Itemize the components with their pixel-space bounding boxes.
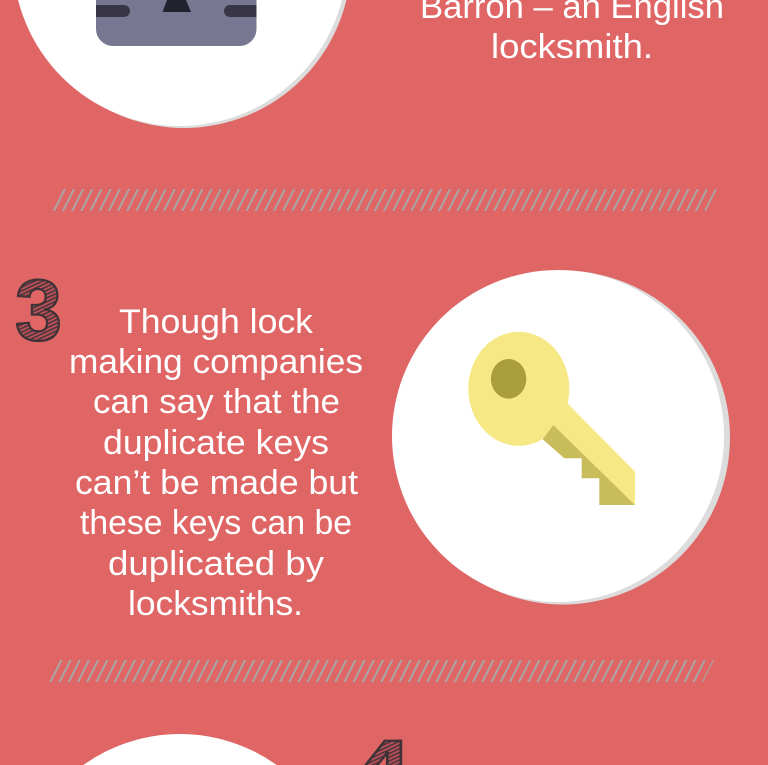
text block: fact three: Though lock <box>119 303 314 341</box>
number 3: 3 <box>15 263 62 359</box>
panel: bottom circle <box>83 734 277 765</box>
text block: fact two ending: locksmith. <box>491 28 653 66</box>
icon: key <box>468 332 635 505</box>
text block: fact three: duplicated by <box>108 545 324 583</box>
white circle <box>392 270 724 602</box>
text block: fact three: can’t be made but <box>75 464 359 502</box>
divider: upper stripes <box>52 189 717 211</box>
circle shadow <box>17 0 351 128</box>
icon: padlock <box>96 0 256 46</box>
divider: lower stripes <box>48 660 714 682</box>
circle shadow <box>396 270 730 604</box>
panel: key circle <box>392 270 730 604</box>
white circle <box>13 0 347 126</box>
text block: fact three: locksmiths. <box>128 585 303 623</box>
text block: fact three <box>69 303 363 623</box>
text block: fact three: making companies <box>69 343 363 381</box>
text block: fact three: duplicate keys <box>103 424 329 462</box>
text block: fact two ending <box>420 0 724 66</box>
text block: fact three: can say that the <box>93 383 340 421</box>
text block: fact three: these keys can be <box>80 504 352 542</box>
panel: lock circle <box>13 0 351 128</box>
